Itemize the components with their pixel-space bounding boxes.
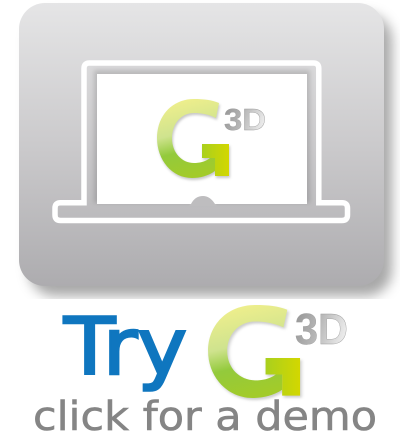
3D label: 3D xyxy=(224,102,266,137)
heading: Try: Try xyxy=(63,303,187,393)
letter G xyxy=(157,99,219,178)
caption: click for a demo: click for a demo xyxy=(33,394,377,440)
laptop outline xyxy=(55,63,348,220)
icon: large G3D logo xyxy=(208,305,348,400)
logo shadow xyxy=(210,307,302,400)
icon: small G3D logo xyxy=(157,99,266,180)
card shadow xyxy=(29,14,392,296)
logo shadow xyxy=(158,101,230,180)
icon: laptop xyxy=(55,63,348,220)
arrow head xyxy=(266,358,300,396)
laptop screen xyxy=(97,74,307,204)
3D label: 3D xyxy=(295,305,348,354)
arrow head xyxy=(202,144,229,176)
panel: grey button card xyxy=(19,3,384,286)
laptop screen shadow xyxy=(94,70,310,203)
letter G xyxy=(208,305,287,398)
laptop notch xyxy=(189,195,217,206)
